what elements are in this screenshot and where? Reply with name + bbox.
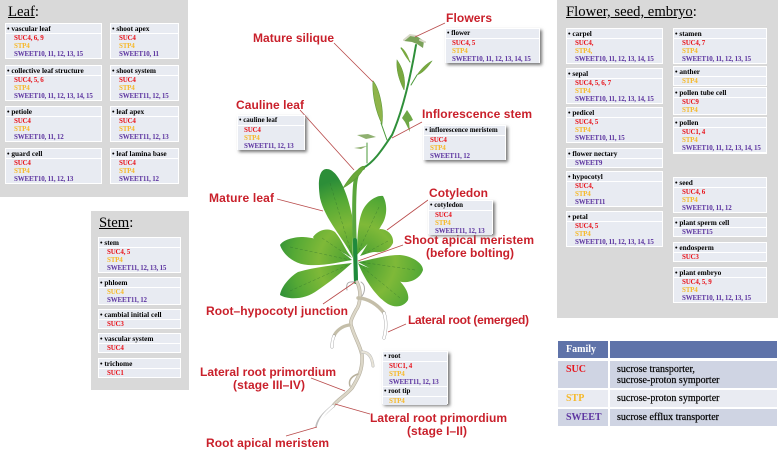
box: vascular system: SUC4 [107, 344, 124, 352]
heading: stem: Stem: [99, 215, 133, 231]
box: carpel: SUC4, [575, 39, 593, 47]
box: vascular leaf: STP4 [14, 42, 30, 50]
callout: cotyledon: SWEET11, 12, 13 [435, 227, 485, 235]
box: endosperm [673, 242, 767, 262]
rosette leaves [280, 169, 423, 306]
callout: cauline leaf: • cauline leaf [239, 116, 277, 124]
box: stem: STP4 [107, 256, 123, 264]
box: carpel: • carpel [568, 29, 592, 38]
box: stamen [673, 28, 767, 64]
structure labels: Cotyledon [429, 186, 488, 200]
structure labels: Cauline leaf [236, 98, 305, 112]
legend: family table: sucrose-proton symporter [617, 393, 719, 404]
callout: cotyledon [428, 200, 493, 234]
callout: cauline leaf [237, 115, 305, 150]
legend: family table: sucrose-proton symporter [617, 375, 719, 386]
box: sepal: SUC4, 5, 6, 7 [575, 79, 611, 87]
callout: inflorescence meristem: SUC4 [430, 136, 447, 144]
box: pollen: • pollen [675, 118, 698, 127]
box: plant sperm cell [673, 217, 767, 237]
legend header [558, 341, 608, 358]
box: sepal: STP4 [575, 87, 591, 95]
callout: cotyledon: • cotyledon [430, 201, 463, 209]
structure labels: Shoot apical meristem [404, 233, 534, 247]
legend row: SWEET: SWEET [566, 412, 602, 423]
box: stamen: • stamen [675, 29, 702, 38]
callout: inflorescence meristem [423, 125, 506, 160]
box: shoot apex: SUC4 [119, 34, 136, 42]
callout: inflorescence meristem: SWEET11, 12 [430, 152, 470, 160]
structure labels: (stage III–IV) [233, 378, 305, 392]
box: phloem: SUC4 [107, 288, 124, 296]
box: petal: STP4 [575, 230, 591, 238]
box: guard cell: • guard cell [7, 149, 42, 158]
box: anther: • anther [675, 67, 700, 76]
box: leaf apex: SUC4 [119, 117, 136, 125]
box: leaf lamina base: • leaf lamina base [112, 149, 167, 158]
box: stem: SWEET11, 12, 13, 15 [107, 264, 166, 272]
box: petiole: SUC4 [14, 117, 31, 125]
box: anther: STP4 [682, 77, 698, 85]
box: plant embryo [673, 267, 767, 303]
heading: leaf: Leaf: [8, 4, 39, 20]
box: shoot system: STP4 [119, 84, 135, 92]
box: trichome: • trichome [100, 359, 132, 368]
box: plant embryo: SUC4, 5, 9 [682, 278, 712, 286]
box: pollen [673, 117, 767, 154]
box: phloem: • phloem [100, 278, 128, 287]
callout: flower: • flower [447, 29, 470, 37]
legend row: STP [558, 390, 608, 407]
box: shoot apex: STP4 [119, 42, 135, 50]
legend row: STP: STP [566, 393, 584, 404]
box: petal: SWEET10, 11, 12, 13, 14, 15 [575, 238, 654, 246]
structure labels: Inflorescence stem [422, 107, 532, 121]
box: leaf lamina base: STP4 [119, 167, 135, 175]
box: sepal: • sepal [568, 69, 588, 78]
box: hypocotyl: STP4 [575, 190, 591, 198]
legend row: SWEET [558, 409, 608, 426]
callout: inflorescence meristem: • inflorescence meristem [425, 126, 498, 134]
box: cambial initial cell [98, 309, 181, 329]
box: hypocotyl: SUC4, [575, 182, 593, 190]
box: shoot system: SUC4 [119, 76, 136, 84]
box: seed: SUC4, 6 [682, 188, 705, 196]
structure labels: Lateral root primordium [200, 365, 336, 379]
legend row: SUC: SUC [566, 364, 586, 375]
structure labels: Lateral root (emerged) [408, 313, 529, 327]
leaf midribs [290, 183, 415, 298]
box: stamen: SUC4, 7 [682, 39, 705, 47]
box: shoot system: SWEET11, 12, 15 [119, 92, 169, 100]
stem and inflorescence [343, 35, 432, 282]
box: vascular system: • vascular system [100, 334, 154, 343]
structure labels: Mature silique [253, 31, 334, 45]
box: vascular leaf: SUC4, 6, 9 [14, 34, 44, 42]
callout: cauline leaf: SWEET11, 12, 13 [244, 142, 294, 150]
box: pollen: STP4 [682, 136, 698, 144]
structure labels: Root apical meristem [206, 436, 329, 450]
box: shoot system: • shoot system [112, 66, 156, 75]
panel: stem [91, 211, 189, 390]
structure labels: (before bolting) [426, 246, 514, 260]
box: leaf lamina base: SWEET11, 12 [119, 175, 159, 183]
callout: flower: SUC4, 5 [452, 39, 475, 47]
callout: inflorescence meristem: STP4 [430, 144, 446, 152]
box: collective leaf structure: • collective leaf structure [7, 66, 84, 75]
callout: root and root tip: STP4 [389, 370, 405, 378]
panel: leaf [0, 0, 188, 197]
callout: cauline leaf: STP4 [244, 134, 260, 142]
callout: cotyledon: SUC4 [435, 211, 452, 219]
box: shoot apex [110, 23, 179, 59]
box: phloem: SWEET11, 12 [107, 296, 147, 304]
box: leaf lamina base: SUC4 [119, 159, 136, 167]
box: cambial initial cell: • cambial initial cell [100, 310, 162, 319]
callout: root and root tip: SWEET11, 12, 13 [389, 378, 439, 386]
box: collective leaf structure: SWEET10, 11, 12, 13, 14, 15 [14, 92, 93, 100]
box: hypocotyl: SWEET11 [575, 198, 605, 206]
box: petiole: • petiole [7, 107, 32, 116]
box: plant sperm cell: • plant sperm cell [675, 218, 729, 227]
box: petiole: STP4 [14, 125, 30, 133]
box: leaf apex [110, 106, 179, 142]
box: hypocotyl: • hypocotyl [568, 172, 603, 181]
heading: flower, seed, embryo: Flower, seed, embryo: [566, 4, 697, 20]
box: guard cell: SWEET10, 11, 12, 13 [14, 175, 73, 183]
legend row: SUC [558, 361, 608, 388]
panel: flower, seed, embryo [557, 0, 778, 318]
box: trichome [98, 358, 181, 378]
callout: flower: SWEET10, 11, 12, 13, 14, 15 [452, 55, 531, 63]
structure labels: Mature leaf [209, 191, 275, 205]
roots [317, 282, 386, 432]
callout: root and root tip [382, 351, 448, 404]
structure labels: Root–hypocotyl junction [206, 304, 348, 318]
box: flower nectary: • flower nectary [568, 149, 617, 158]
box: leaf apex: • leaf apex [112, 107, 144, 116]
box: stem [98, 237, 181, 273]
box: vascular leaf: SWEET10, 11, 12, 13, 15 [14, 50, 83, 58]
box: pedicel [566, 107, 663, 143]
box: shoot apex: SWEET10, 11 [119, 50, 159, 58]
box: guard cell: STP4 [14, 167, 30, 175]
box: pedicel: SWEET10, 11, 15 [575, 134, 625, 142]
box: hypocotyl [566, 171, 663, 207]
box: shoot apex: • shoot apex [112, 24, 149, 33]
box: leaf lamina base [110, 148, 179, 184]
callout: root and root tip: SUC1, 4 [389, 362, 412, 370]
box: vascular leaf [5, 23, 102, 59]
box: phloem [98, 277, 181, 305]
box: endosperm: • endosperm [675, 243, 714, 252]
callout: cauline leaf: SUC4 [244, 126, 261, 134]
box: vascular system [98, 333, 181, 353]
box: cambial initial cell: SUC3 [107, 320, 124, 328]
box: seed: STP4 [682, 196, 698, 204]
structure labels: Lateral root primordium [370, 411, 507, 425]
box: petal: SUC4, 5 [575, 222, 598, 230]
box: leaf apex: SWEET11, 12, 13 [119, 133, 169, 141]
box: sepal: SWEET10, 11, 12, 13, 14, 15 [575, 95, 654, 103]
callout: cotyledon: STP4 [435, 219, 451, 227]
legend: family table [558, 341, 777, 426]
legend: family table: sucrose efflux transporter [617, 412, 719, 423]
callout: root and root tip: STP4 [389, 397, 405, 405]
box: collective leaf structure: STP4 [14, 84, 30, 92]
box: anther [673, 66, 767, 86]
box: guard cell: SUC4 [14, 159, 31, 167]
box: pollen tube cell: • pollen tube cell [675, 88, 726, 97]
box: pedicel: • pedicel [568, 108, 594, 117]
box: carpel [566, 28, 663, 64]
box: endosperm: SUC3 [682, 253, 699, 261]
box: stamen: SWEET10, 11, 12, 13, 15 [682, 55, 751, 63]
structure labels: (stage I–II) [407, 424, 467, 438]
box: seed: • seed [675, 178, 693, 187]
box: plant embryo: • plant embryo [675, 268, 721, 277]
structure labels [200, 11, 534, 450]
box: plant embryo: SWEET10, 11, 12, 13, 15 [682, 294, 751, 302]
box: petal [566, 211, 663, 247]
box: pollen tube cell [673, 87, 767, 115]
box: pedicel: STP4 [575, 126, 591, 134]
box: petal: • petal [568, 212, 588, 221]
box: flower nectary: SWEET9 [575, 159, 602, 167]
box: leaf apex: STP4 [119, 125, 135, 133]
callout: flower: STP4 [452, 47, 468, 55]
box: carpel: STP4, [575, 47, 592, 55]
box: plant sperm cell: SWEET15 [682, 228, 712, 236]
leader lines [277, 23, 445, 436]
box: petiole [5, 106, 102, 142]
box: pedicel: SUC4, 5 [575, 118, 598, 126]
box: seed: SWEET10, 11, 12 [682, 204, 732, 212]
box: pollen: SUC1, 4 [682, 128, 705, 136]
box: carpel: SWEET10, 11, 12, 13, 14, 15 [575, 55, 654, 63]
box: flower nectary [566, 148, 663, 168]
box: vascular leaf: • vascular leaf [7, 24, 51, 33]
structure labels: Flowers [446, 11, 492, 25]
box: plant embryo: STP4 [682, 286, 698, 294]
box: stem: • stem [100, 238, 119, 247]
box: stem: SUC4, 5 [107, 248, 130, 256]
box: collective leaf structure: SUC4, 5, 6 [14, 76, 44, 84]
box: sepal [566, 68, 663, 104]
box: pollen tube cell: STP4 [682, 106, 698, 114]
box: guard cell [5, 148, 102, 184]
box: seed [673, 177, 767, 213]
callout: root and root tip: • root [384, 352, 401, 360]
box: pollen tube cell: SUC9 [682, 98, 699, 106]
box: collective leaf structure [5, 65, 102, 101]
legend header: Family [566, 344, 596, 355]
legend: family table: sucrose transporter, [617, 364, 695, 375]
box: stamen: STP4 [682, 47, 698, 55]
callout: flower [445, 28, 540, 63]
box: shoot system [110, 65, 179, 101]
box: trichome: SUC1 [107, 369, 124, 377]
box: pollen: SWEET10, 11, 12, 13, 14, 15 [682, 144, 761, 152]
box: petiole: SWEET10, 11, 12 [14, 133, 64, 141]
callout: root and root tip: • root tip [384, 387, 410, 395]
